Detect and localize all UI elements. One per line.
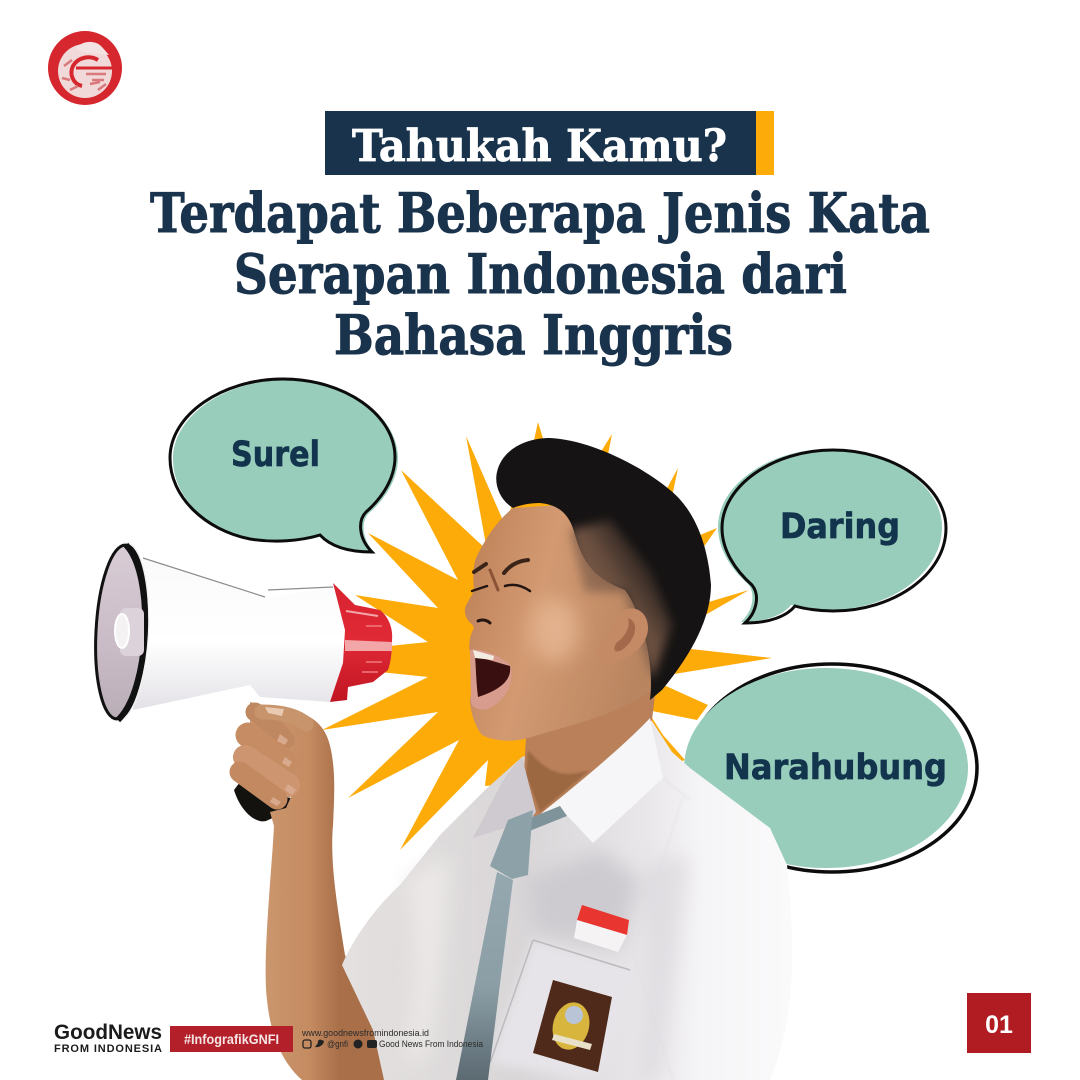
title: Terdapat Beberapa Jenis Kata (150, 181, 930, 245)
shirt shading (405, 778, 690, 1080)
hand gripping megaphone (240, 702, 334, 826)
forearm (266, 825, 390, 1080)
horn body (133, 558, 346, 710)
title: Serapan Indonesia dari (234, 242, 847, 306)
tie (456, 806, 567, 1080)
ear (597, 609, 648, 663)
logo: GNFI red circle (48, 31, 122, 105)
footer: website and social handles: www.goodnewsfromindonesia.id (301, 1028, 429, 1038)
hair (496, 438, 711, 700)
speech bubble: Surel (170, 379, 398, 553)
red cap (330, 583, 392, 702)
speech bubble: Narahubung: Narahubung (724, 748, 947, 788)
megaphone (90, 541, 392, 821)
speech bubble: Surel: Surel (231, 435, 320, 475)
heading tag: Tahukah Kamu: Tahukah Kamu? (352, 121, 727, 172)
footer: hashtag tag (170, 1026, 293, 1052)
footer: website and social handles: Good News From Indonesia (379, 1039, 483, 1049)
footer: website and social handles: @gnfi (327, 1039, 348, 1049)
speech bubble: Narahubung (684, 664, 977, 872)
starburst (322, 422, 772, 850)
title (150, 181, 930, 367)
student figure (266, 438, 792, 1080)
handle (234, 782, 291, 821)
page number badge (967, 993, 1031, 1053)
eyes and brows (472, 560, 530, 623)
horn mouth (90, 541, 154, 723)
footer: GoodNews wordmark: FROM INDONESIA (54, 1043, 162, 1055)
footer: GoodNews wordmark (54, 1021, 162, 1055)
hair fade (570, 520, 672, 680)
footer: GoodNews wordmark: GoodNews (54, 1021, 162, 1044)
school badge (533, 980, 612, 1072)
shirt (342, 718, 792, 1080)
cheek highlight (531, 598, 579, 662)
face (465, 505, 661, 741)
footer: website and social handles (301, 1028, 483, 1049)
speech bubble: Daring (718, 449, 946, 623)
footer: hashtag tag: #InfografikGNFI (184, 1032, 279, 1047)
collar (473, 718, 663, 843)
flag patch (574, 905, 629, 952)
title: Bahasa Inggris (334, 303, 733, 367)
open mouth (470, 650, 512, 710)
speaker driver (120, 608, 144, 656)
page number badge: 01 (985, 1011, 1013, 1039)
neck (524, 678, 657, 820)
speech bubble: Daring: Daring (780, 507, 900, 547)
